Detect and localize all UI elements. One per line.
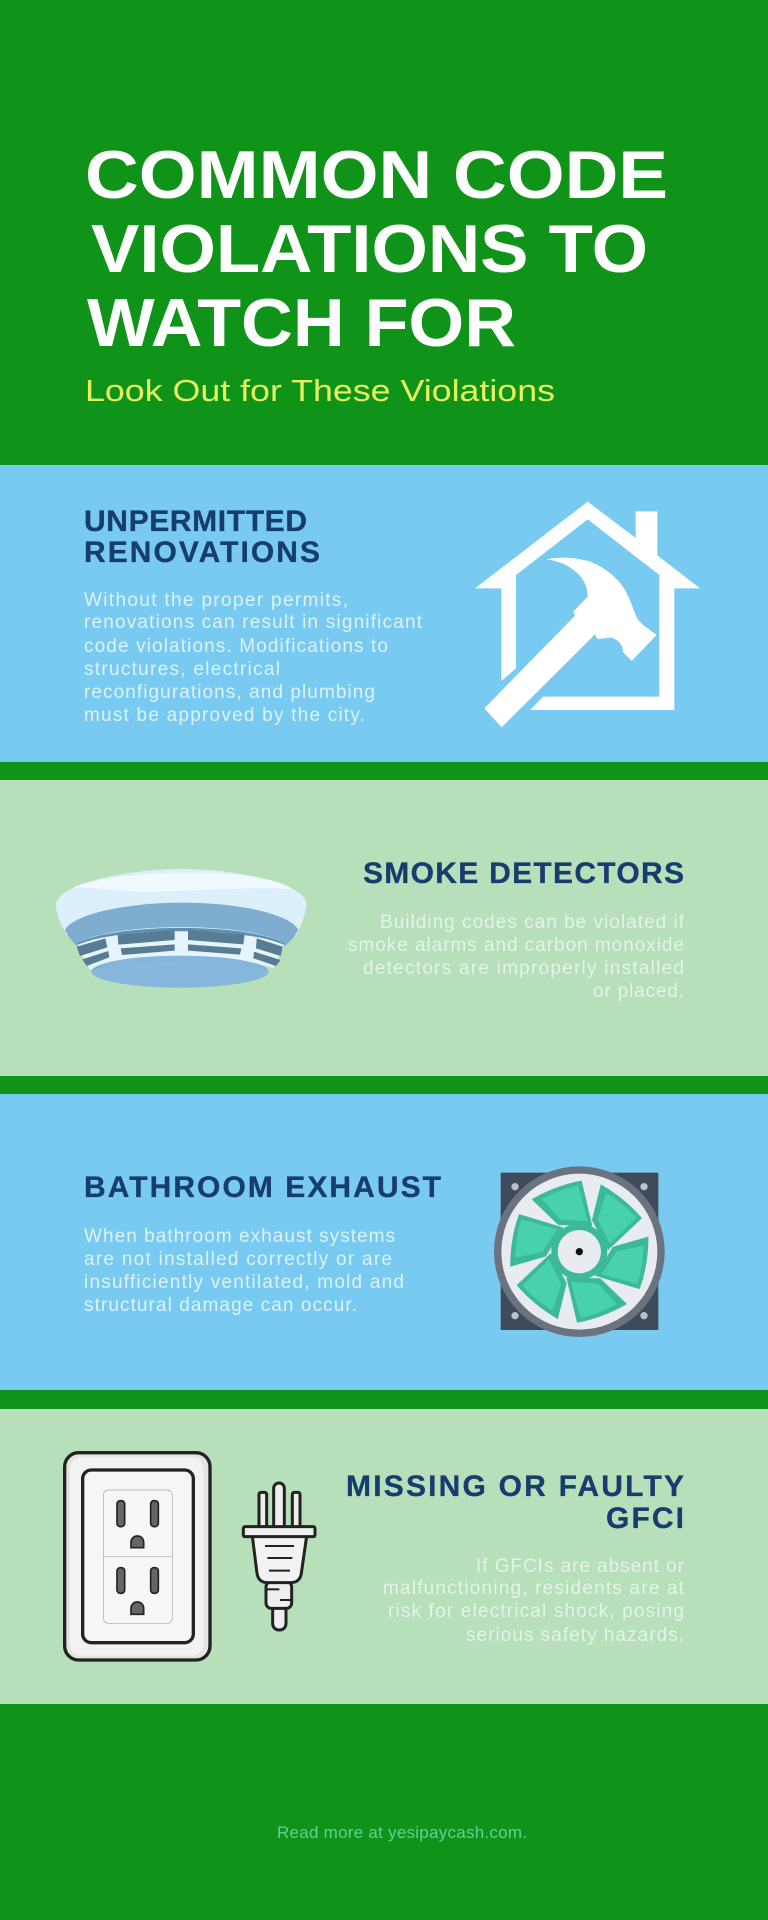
heading: missing or faulty gfci: GFCI [606,1502,684,1535]
heading: missing or faulty gfci [346,1470,684,1535]
icon: wall outlet [65,1453,210,1660]
text block: unpermitted renovations: must be approved by the city. [84,705,365,726]
text block: missing or faulty gfci: serious safety hazards. [466,1625,684,1646]
text block: missing or faulty gfci: risk for electrical shock, posing [388,1601,684,1622]
panel: smoke detectors [0,780,768,1076]
text block: bathroom exhaust: When bathroom exhaust systems [84,1226,395,1247]
text block: unpermitted renovations: renovations can result in significant [84,612,423,633]
text block: missing or faulty gfci: malfunctioning, residents are at [383,1578,685,1599]
icon: smoke detector [56,869,307,988]
heading: unpermitted renovations [84,505,320,569]
title: VIOLATIONS TO [91,211,648,287]
icon: exhaust fan [494,1166,665,1337]
footer: source link: Read more at yesipaycash.com. [277,1823,527,1842]
title [85,137,668,361]
text block: missing or faulty gfci [383,1556,685,1646]
text block: bathroom exhaust: structural damage can occur. [84,1295,357,1316]
text block: unpermitted renovations: code violations. Modifications to [84,636,388,657]
text block: unpermitted renovations [84,590,423,726]
heading: bathroom exhaust: BATHROOM EXHAUST [84,1171,441,1204]
text block: smoke detectors: detectors are improperly installed [363,958,684,979]
title: COMMON CODE [85,137,668,213]
text block: unpermitted renovations: reconfigurations, and plumbing [84,682,375,703]
text block: bathroom exhaust [84,1226,404,1316]
panel: unpermitted renovations [0,465,768,762]
panel: missing or faulty gfci [0,1409,768,1704]
heading: missing or faulty gfci: MISSING OR FAULTY [346,1470,684,1503]
text block: unpermitted renovations: structures, electrical [84,659,280,680]
panel: bathroom exhaust [0,1094,768,1390]
text block: smoke detectors [348,912,685,1002]
heading: unpermitted renovations: UNPERMITTED [84,505,307,538]
text block: smoke detectors: Building codes can be violated if [380,912,685,933]
text block: smoke detectors: smoke alarms and carbon monoxide [348,935,684,956]
subtitle: Look Out for These Violations [85,373,555,408]
heading: unpermitted renovations: RENOVATIONS [84,536,320,569]
text block: unpermitted renovations: Without the proper permits, [84,590,348,611]
text block: smoke detectors: or placed. [593,981,684,1002]
title: WATCH FOR [87,285,516,361]
icon: electrical plug [243,1483,315,1630]
icon: house with hammer [475,502,700,727]
text block: bathroom exhaust: are not installed correctly or are [84,1249,392,1270]
text block: missing or faulty gfci: If GFCIs are absent or [476,1556,685,1577]
heading: smoke detectors: SMOKE DETECTORS [363,857,684,890]
text block: bathroom exhaust: insufficiently ventilated, mold and [84,1272,404,1293]
